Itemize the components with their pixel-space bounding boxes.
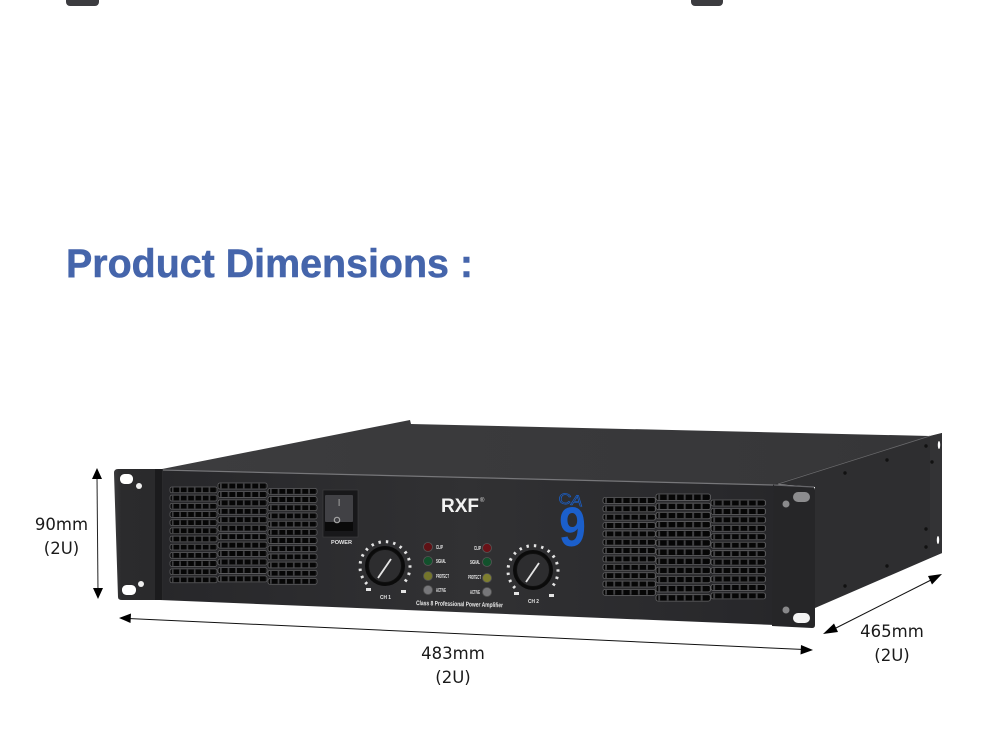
channel 2 status LEDs: PROTECT	[468, 575, 481, 581]
left rack ear	[114, 469, 163, 600]
arrow: height	[92, 468, 103, 599]
right rack ear	[772, 485, 815, 628]
channel 1 status LEDs	[424, 542, 449, 594]
height label: (2U)	[44, 539, 79, 558]
channel 2 status LEDs: SIGNAL	[470, 560, 480, 566]
width label: (2U)	[435, 668, 471, 687]
height label	[35, 515, 88, 558]
channel 2 status LEDs: CLIP	[474, 546, 481, 552]
CA 9 model logo: CA	[557, 490, 584, 510]
CH2 knob: CH 2	[528, 599, 539, 605]
amplifier front panel	[160, 469, 775, 625]
RXF logo: RXF	[441, 495, 479, 517]
right vent grille	[603, 494, 766, 601]
power switch: POWER	[331, 540, 352, 546]
height label: 90mm	[35, 515, 88, 534]
channel 1 status LEDs: CLIP	[436, 545, 443, 551]
width label: 483mm	[421, 644, 485, 663]
depth label: (2U)	[874, 646, 910, 665]
CH1 knob: CH 1	[380, 595, 391, 601]
title: Product Dimensions :	[66, 242, 473, 286]
channel 2 status LEDs	[468, 544, 492, 596]
channel 1 status LEDs: PROTECT	[436, 574, 449, 580]
CA 9 model logo: 9	[559, 495, 586, 558]
power switch	[323, 490, 358, 546]
channel 1 status LEDs: ACTIVE	[436, 588, 446, 594]
depth label	[860, 622, 924, 665]
width label	[421, 644, 485, 687]
left vent grille	[170, 483, 317, 584]
amplifier product image	[114, 420, 942, 628]
channel 1 status LEDs: SIGNAL	[436, 559, 446, 565]
CH2 knob	[508, 546, 558, 605]
depth label: 465mm	[860, 622, 924, 641]
arrow: width	[119, 614, 813, 654]
CH1 knob	[360, 542, 410, 601]
amplifier side panel	[775, 433, 942, 608]
amplifier class caption: Class 8 Professional Power Amplifier	[416, 600, 503, 609]
top cropped foot right	[691, 0, 723, 6]
amplifier top surface	[162, 420, 930, 485]
channel 2 status LEDs: ACTIVE	[470, 590, 480, 596]
top cropped foot left	[66, 0, 99, 6]
arrow: depth	[823, 574, 942, 634]
side panel screws	[843, 441, 940, 588]
RXF logo: ®	[480, 497, 485, 504]
